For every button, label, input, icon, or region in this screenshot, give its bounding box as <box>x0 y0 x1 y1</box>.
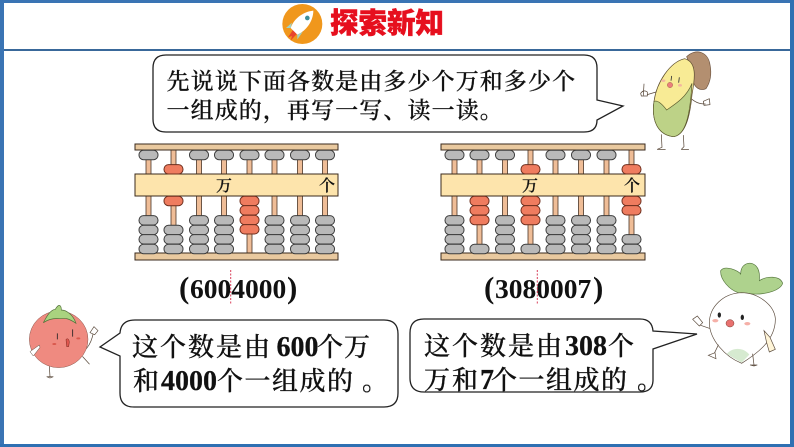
unit labels: 万 <box>216 177 232 195</box>
icon: rocket badge <box>282 4 322 44</box>
frame bars <box>441 144 645 260</box>
active beads <box>470 165 641 225</box>
active beads <box>164 165 259 234</box>
speech bubble: tomato <box>100 320 398 407</box>
tomato explanation text: 和 <box>133 367 159 396</box>
speech bubble: radish <box>410 319 697 396</box>
instruction text: 一组成的，再写一写、读一读。 <box>166 98 504 124</box>
unit labels: 个 <box>319 177 335 195</box>
rods <box>452 150 634 253</box>
number label: 3080007: ) <box>593 270 603 305</box>
tomato explanation text: 这个数是由 <box>132 333 272 362</box>
radish explanation text: 个一组成的 <box>491 366 629 395</box>
abacus: 3080007 <box>441 144 645 260</box>
tomato explanation text: 。 <box>362 367 388 396</box>
radish explanation text: 7 <box>480 365 494 396</box>
number label: 6004000: 6004000 <box>190 273 286 304</box>
radish explanation text: 这个数是由 <box>424 332 564 361</box>
character: corn <box>641 52 711 149</box>
title: 探索新知 <box>330 8 444 40</box>
radish explanation text: 。 <box>637 366 663 395</box>
character: tomato <box>29 305 98 378</box>
radish explanation text: 万和 <box>424 366 480 395</box>
tomato explanation text: 个万 <box>317 333 371 362</box>
number label: 3080007: 3080007 <box>495 273 592 304</box>
number label: 6004000: ( <box>179 270 189 305</box>
unit labels: 万 <box>522 177 538 195</box>
tomato explanation text: 600 <box>276 332 318 363</box>
tomato explanation text: 4000 <box>161 366 217 397</box>
number label: 6004000: ) <box>287 270 297 305</box>
rods <box>146 150 328 253</box>
abacus: 6004000 <box>135 144 338 260</box>
character: radish <box>693 263 783 366</box>
radish explanation text: 个 <box>608 332 634 361</box>
radish explanation text: 308 <box>565 331 607 362</box>
grey beads <box>139 150 334 254</box>
instruction text: 先说说下面各数是由多少个万和多少个 <box>166 69 576 94</box>
tomato explanation text: 个一组成的 <box>217 367 355 396</box>
frame bars <box>135 144 338 260</box>
number label: 3080007: ( <box>484 270 494 305</box>
speech bubble: instruction <box>153 55 623 132</box>
grey beads <box>445 150 641 254</box>
unit labels: 个 <box>624 177 640 195</box>
